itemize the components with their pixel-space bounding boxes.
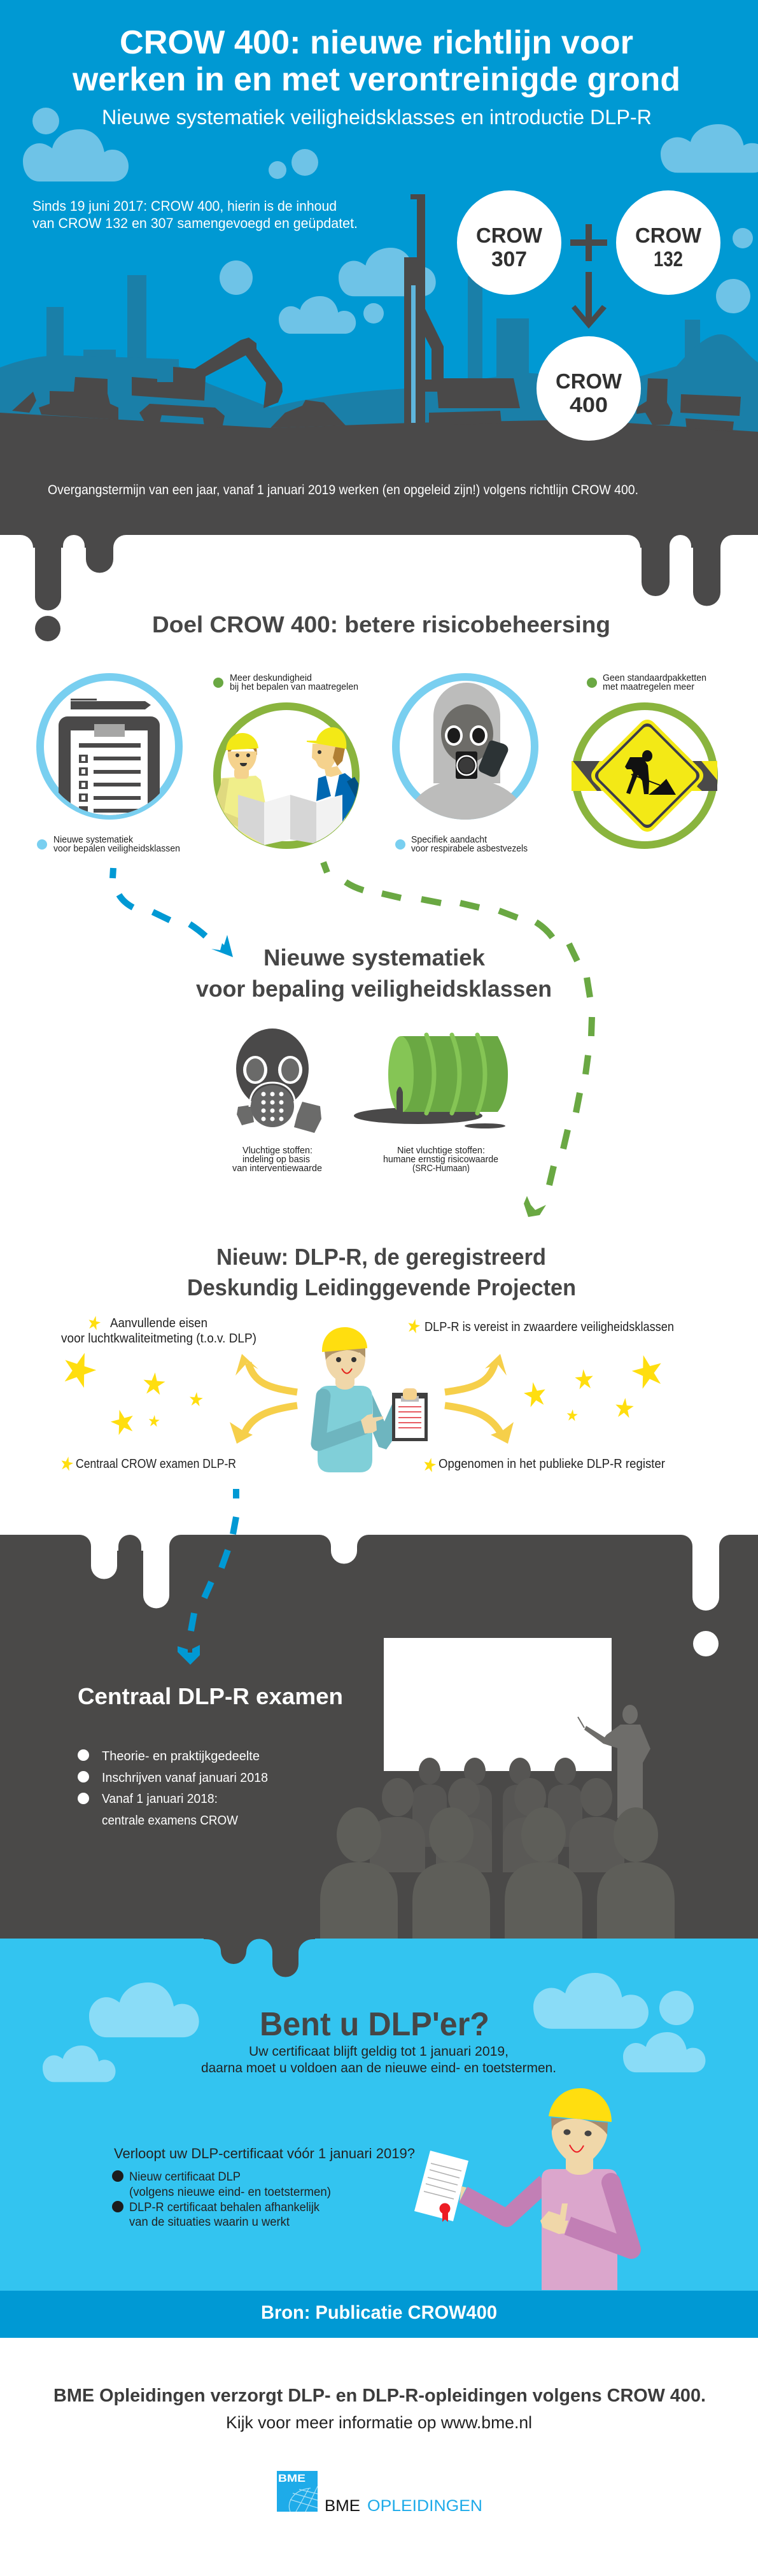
bulldozer — [12, 377, 118, 420]
heading: doel crow 400: Doel CROW 400: betere risicobeheersing — [152, 611, 610, 637]
closing text — [53, 2386, 706, 2432]
logo: bme opleidingen: BME — [278, 2472, 305, 2484]
cloud lower — [279, 296, 356, 334]
list: exam facts: centrale examens CROW — [102, 1813, 239, 1828]
caption: specifiek aandacht: voor respirabele asbestvezels — [411, 844, 528, 854]
drilling rig — [404, 194, 520, 425]
left arm — [460, 2186, 467, 2202]
caption: vluchtige stoffen — [232, 1145, 322, 1174]
cloud a — [89, 1982, 199, 2037]
dark drips — [204, 1936, 315, 1977]
clipboard — [392, 1393, 428, 1441]
labels crow: 307 — [491, 247, 527, 271]
caption: niet vluchtige stoffen: (SRC-Humaan) — [412, 1163, 470, 1174]
right worker — [307, 727, 359, 841]
certificate — [414, 2151, 468, 2222]
figure: worker with certificate — [414, 2088, 631, 2290]
figure: worker with clipboard — [318, 1327, 428, 1472]
caption: geen standaardpakketten: met maatregelen meer — [603, 682, 694, 692]
labels crow: CROW — [476, 224, 543, 247]
caption: niet vluchtige stoffen: humane ernstig risicowaarde — [383, 1154, 498, 1165]
heading: nieuwe systematiek: voor bepaling veiligheidsklassen — [196, 976, 552, 1002]
skyline — [0, 275, 758, 446]
labels crow: CROW — [635, 224, 702, 247]
top edge — [0, 1535, 758, 1939]
decorative stars — [59, 1348, 666, 1436]
caption: specifiek aandacht: Specifiek aandacht — [411, 835, 487, 845]
audience back row — [412, 1758, 582, 1847]
caption: vluchtige stoffen: van interventiewaarde — [232, 1163, 322, 1174]
labels crow: 132 — [654, 247, 683, 271]
illustration: construction machines and ground — [0, 194, 758, 548]
white drips — [91, 1549, 719, 1656]
title: CROW 400: nieuwe richtlijn voor — [120, 24, 633, 61]
title — [72, 24, 680, 98]
item: centraal examen: Centraal CROW examen DLP-R — [76, 1457, 236, 1471]
logo: bme opleidingen: OPLEIDINGEN — [367, 2497, 482, 2515]
labels crow: 400 — [570, 393, 608, 416]
caption: niet vluchtige stoffen: Niet vluchtige stoffen: — [397, 1145, 485, 1156]
caption: meer deskundigheid: bij het bepalen van maatregelen — [230, 682, 358, 692]
arrow down — [572, 272, 607, 329]
list: exam facts: Inschrijven vanaf januari 2018 — [102, 1770, 268, 1785]
item: publiek register: Opgenomen in het publieke DLP-R register — [439, 1457, 665, 1471]
caption: vluchtige stoffen: indeling op basis — [242, 1154, 310, 1165]
cloud left — [23, 129, 129, 181]
icon: checklist circle — [40, 677, 179, 837]
heading: bent u dlp'er: Bent u DLP'er? — [260, 2006, 489, 2043]
heading: nieuwe systematiek: Nieuwe systematiek — [263, 944, 486, 971]
item: vereist in zwaardere klassen: DLP-R is vereist in zwaardere veiligheidsklassen — [425, 1320, 674, 1334]
crow 307 plus 132 becomes 400 diagram — [457, 190, 720, 441]
text: certificaat geldig: Uw certificaat blijft geldig tot 1 januari 2019, — [249, 2044, 509, 2059]
caption: geen standaardpakketten: Geen standaardpakketten — [603, 673, 706, 683]
arrow: green dashed to dlp-r — [323, 862, 592, 1217]
text: verloopt certificaat: van de situaties waarin u werkt — [129, 2216, 290, 2229]
text: verloopt certificaat: Nieuw certificaat DLP — [129, 2170, 241, 2184]
map — [238, 795, 342, 845]
excavator — [132, 338, 283, 428]
worker pictogram — [625, 750, 676, 795]
source bar: Bron: Publicatie CROW400 — [261, 2302, 497, 2323]
heading: nieuw dlp-r: Nieuw: DLP-R, de geregistreerd — [216, 1244, 546, 1270]
cloud b — [43, 2046, 116, 2082]
caption: meer deskundigheid: Meer deskundigheid — [230, 673, 312, 683]
icon: gas mask — [236, 1028, 321, 1133]
head — [335, 1372, 354, 1390]
plus sign — [570, 224, 607, 261]
tractor with trailer — [636, 378, 741, 432]
text: verloopt certificaat: DLP-R certificaat behalen afhankelijk — [129, 2201, 319, 2214]
cloud c — [533, 1973, 649, 2029]
caption: specifiek aandacht — [395, 835, 528, 854]
presenter — [578, 1705, 650, 1818]
audience middle row — [370, 1778, 624, 1872]
list: exam facts: Theorie- en praktijkgedeelte — [102, 1749, 260, 1763]
list: dlp-r requirements — [60, 1314, 674, 1472]
screen — [384, 1638, 612, 1771]
audience front row — [320, 1807, 675, 1939]
labels crow: CROW — [556, 369, 622, 393]
arrow: blue dashed to exam — [178, 1489, 236, 1665]
body — [318, 1386, 372, 1472]
icon: road work sign circle — [572, 706, 717, 845]
icon: two workers with map — [213, 706, 360, 857]
left worker — [216, 733, 265, 846]
closing text: BME Opleidingen verzorgt DLP- en DLP-R-opleidingen volgens CROW 400. — [53, 2386, 706, 2406]
arrows: yellow curved — [230, 1354, 514, 1444]
item: aanvullende eisen: Aanvullende eisen — [110, 1316, 207, 1330]
text: certificaat geldig: daarna moet u voldoen aan de nieuwe eind- en toetstermen. — [201, 2061, 556, 2075]
heading: nieuw dlp-r — [187, 1244, 576, 1300]
source bar — [0, 2291, 758, 2338]
small round clouds — [32, 108, 753, 324]
text: verloopt certificaat: Verloopt uw DLP-certificaat vóór 1 januari 2019? — [114, 2145, 415, 2161]
icon: leaking barrel — [354, 1035, 508, 1128]
heading: centraal dlp-r examen: Centraal DLP-R examen — [78, 1683, 343, 1709]
intro text: van CROW 132 en 307 samengevoegd en geüpdatet. — [32, 215, 358, 231]
logo: bme opleidingen — [277, 2471, 482, 2515]
panel: exam section — [0, 1535, 758, 1939]
cloud middle — [339, 248, 436, 296]
arrow: blue dashed to nieuwe systematiek — [113, 868, 233, 957]
ground drips — [0, 535, 758, 641]
intro text — [32, 198, 358, 231]
cloud right — [661, 124, 758, 173]
caption: geen standaardpakketten — [587, 673, 706, 692]
caption: niet vluchtige stoffen — [383, 1145, 498, 1174]
transition text: Overgangstermijn van een jaar, vanaf 1 januari 2019 werken (en opgeleid zijn!) volgens richtlijn CROW 400. — [48, 483, 638, 497]
caption: nieuwe systematiek: Nieuwe systematiek — [53, 835, 134, 845]
closing text: Kijk voor meer informatie op www.bme.nl — [226, 2413, 532, 2432]
heading: nieuwe systematiek — [196, 944, 552, 1002]
thumb and arm — [540, 2203, 568, 2234]
labels crow — [476, 224, 702, 416]
heading: nieuw dlp-r: Deskundig Leidinggevende Projecten — [187, 1274, 576, 1300]
caption: meer deskundigheid — [213, 673, 358, 692]
panel: header sky — [0, 0, 758, 446]
subtitle: Nieuwe systematiek veiligheidsklasses en introductie DLP-R — [102, 106, 652, 129]
icon: hazmat suit circle — [392, 673, 538, 820]
text: verloopt certificaat: (volgens nieuwe eind- en toetstermen) — [129, 2186, 331, 2199]
title: werken in en met verontreinigde grond — [72, 61, 680, 98]
logo: bme opleidingen: BME — [325, 2497, 360, 2515]
intro text: Sinds 19 juni 2017: CROW 400, hierin is de inhoud — [32, 198, 337, 214]
list: exam facts — [78, 1749, 268, 1828]
item: aanvullende eisen: voor luchtkwaliteitmeting (t.o.v. DLP) — [61, 1332, 256, 1346]
panel: bent u dlp'er section — [0, 1936, 758, 2293]
text: certificaat geldig — [201, 2044, 556, 2075]
caption: vluchtige stoffen: Vluchtige stoffen: — [242, 1145, 312, 1156]
text: verloopt certificaat — [112, 2145, 415, 2229]
soil heap — [270, 400, 346, 428]
caption: nieuwe systematiek: voor bepalen veiligheidsklassen — [53, 844, 180, 854]
head — [566, 2156, 593, 2175]
caption: nieuwe systematiek — [37, 835, 180, 854]
body — [542, 2169, 617, 2290]
list: exam facts: Vanaf 1 januari 2018: — [102, 1791, 218, 1806]
item: aanvullende eisen — [61, 1314, 256, 1346]
cloud d — [623, 2032, 705, 2072]
